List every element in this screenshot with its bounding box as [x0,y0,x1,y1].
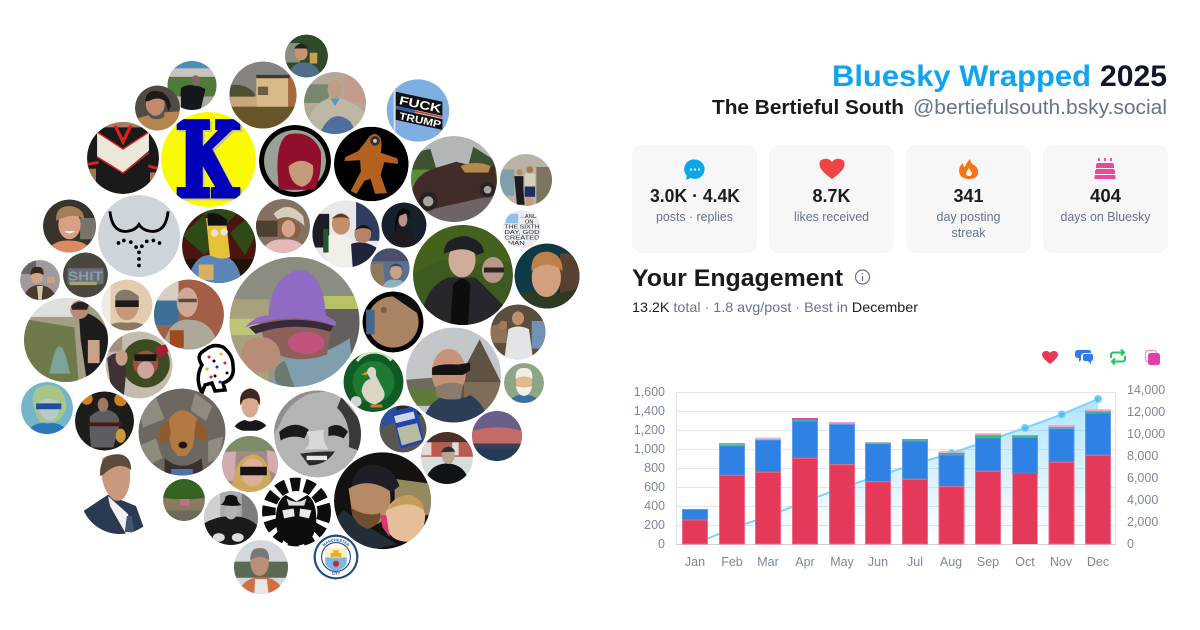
avatar: rugby shirt [87,122,159,194]
avatar: sunglasses man [102,280,152,330]
bar: Mar [755,438,781,544]
avatar: two men with bottle [312,200,380,268]
avatar: cartoon bartender [182,209,256,283]
panel: likes received: likes received [794,210,869,224]
panel: likes received: 8.7K [812,186,850,206]
avatar: laughing man with tie [20,260,60,300]
avatar: illustrated old man [504,363,544,403]
avatar: flag: TRUMP [398,111,442,131]
panel: posts and replies: 3.0K · 4.4K [650,186,740,206]
icon: replies [1075,350,1093,364]
month labels: Jan [685,555,705,569]
avatar: wall and hedge [163,479,205,521]
avatar: tattoo dots face [98,195,180,277]
avatar: man in bowler hat [204,491,258,545]
icon: quotes [1146,350,1160,365]
bar: Jul [902,439,928,544]
panel: days on Bluesky: 404 [1090,186,1121,206]
panel: day posting streak [906,145,1031,253]
left axis labels: 1,000 [634,442,665,456]
avatar: couple [500,154,552,206]
right axis labels: 8,000 [1127,449,1158,463]
month labels: Mar [757,555,779,569]
avatar: Manchester City crest [314,534,358,580]
icon: like [1042,351,1058,364]
avatar: pyramid man [406,328,501,422]
grid lines [676,392,1116,544]
bar: Apr [792,418,818,544]
month labels [685,555,1109,569]
avatar cluster [20,34,580,594]
avatar: ginger man [514,244,580,308]
avatar: wall with graffiti word [63,252,108,298]
avatar: father and son [334,452,431,549]
avatar: stencil face [261,476,332,548]
month labels: Jul [907,555,923,569]
bar: Jun [865,442,891,544]
title: Bluesky Wrapped [832,60,1091,93]
left axis labels: 0 [658,537,665,551]
avatar: book [380,406,426,452]
left axis labels: 400 [644,499,665,513]
avatar: quotation text: ON [525,219,533,225]
left axis labels: 800 [644,461,665,475]
icon: birthday cake [1094,158,1116,179]
avatar: woman in sunglasses with blossom [222,436,278,492]
avatar: shoe car [411,136,497,222]
panel: posts and replies [632,145,757,253]
panel: day posting streak: streak [952,226,986,240]
avatar: quotation text: THE SIXTH [505,225,539,231]
month labels: May [830,555,855,569]
panel: likes received [769,145,894,253]
bar: Jan [682,510,708,544]
avatar: black ring face [362,292,424,352]
panel: day posting streak: 341 [954,186,984,206]
bar: Oct [1012,435,1038,544]
icon: info [856,270,870,284]
right axis labels: 12,000 [1127,405,1165,419]
avatar: dachshund dog [138,388,226,476]
month labels: Sep [977,555,999,569]
avatar: scribble figure [198,346,233,393]
left axis labels: 1,400 [634,404,665,418]
avatar: quotation text: MAN [508,241,525,247]
left axis labels [634,385,665,551]
avatar: wall with graffiti word: SHIT [68,269,103,284]
title: 2025 [1100,60,1167,93]
month labels: Nov [1050,555,1073,569]
right axis labels: 4,000 [1127,493,1158,507]
avatar: quotation text: ...AND [520,214,537,220]
right axis labels: 6,000 [1127,471,1158,485]
display name and handle: The Bertieful South [712,97,904,119]
avatar: garden man [24,298,108,382]
left axis labels: 1,200 [634,423,665,437]
avatar: smiling blond man [43,200,96,252]
avatar: man mouth open [135,86,180,130]
avatar: letter K [161,112,256,207]
bar: Sep [975,433,1001,544]
avatar: painted face [21,382,73,434]
left axis labels: 1,600 [634,385,665,399]
avatar: monk wreath [106,332,172,398]
bar: May [829,422,855,544]
avatar: old man black and white [274,390,361,478]
avatar: young man in suit [80,454,160,534]
avatar: orange jacket man [234,540,288,594]
avatar: purple bucket hat man [230,257,360,387]
icon: heart [820,159,844,179]
avatar: two men in black [413,225,513,325]
icon: reposts [1111,350,1125,364]
panel: days on Bluesky: days on Bluesky [1060,210,1151,224]
bar: Nov [1048,425,1074,544]
avatar: guitar man [75,392,134,450]
left axis labels: 200 [644,518,665,532]
avatar: man in white shirt [490,304,546,360]
month labels: Apr [795,555,815,569]
avatar: house [230,62,296,128]
right axis labels: 10,000 [1127,427,1165,441]
stacked bars [682,409,1111,544]
avatar: orange figure [334,127,409,201]
avatar: quotation text: DAY, GOD [505,230,539,236]
bar: Dec [1085,409,1111,544]
display name and handle: @bertiefulsouth.bsky.social [913,97,1167,119]
right axis labels: 2,000 [1127,515,1158,529]
avatar: beige jumper man [304,72,366,134]
month labels: Jun [868,555,888,569]
left axis labels: 600 [644,480,665,494]
heading: Your Engagement: Your Engagement [632,265,843,292]
cumulative area and line [695,396,1102,544]
month labels: Aug [940,555,962,569]
avatar: flag: FUCK [398,93,443,116]
avatar: woman in hat [256,199,310,253]
avatar: Manchester City crest: MANCHESTER [322,538,350,546]
avatar: man with pint [285,34,328,78]
avatar: red hat man [259,125,331,197]
month labels: Oct [1015,555,1035,569]
engagement chart [634,383,1165,569]
panel: day posting streak: day posting [936,210,1001,224]
avatar: cap man [421,432,473,484]
avatar: sunset [472,411,522,461]
avatar: young man [234,388,266,431]
avatar: stadium [168,61,216,110]
bar: Aug [938,451,964,544]
chart legend icons [1042,350,1160,365]
avatar: flag [387,79,449,142]
avatar: small group selfie [370,248,410,288]
avatar: quotation text: CREATED [505,236,539,242]
month labels: Feb [721,555,743,569]
avatar: Manchester City crest: CITY [332,572,340,575]
avatar: bald man with beer [154,280,224,350]
avatar: dark long hair [382,202,426,248]
avatar: quotation text [503,210,541,248]
panel: days on Bluesky [1043,145,1168,253]
engagement summary: 13.2K total · 1.8 avg/post · Best in December [632,299,918,315]
icon: speech bubble [684,159,705,180]
right axis labels: 14,000 [1127,383,1165,397]
bar: Feb [719,443,745,544]
month labels: Dec [1087,555,1109,569]
avatar: duck badge [344,352,404,412]
display name and handle [712,97,1167,119]
right axis labels: 0 [1127,537,1134,551]
icon: flame [959,159,978,179]
right axis labels [1127,383,1165,551]
panel: posts and replies: posts · replies [656,210,733,224]
